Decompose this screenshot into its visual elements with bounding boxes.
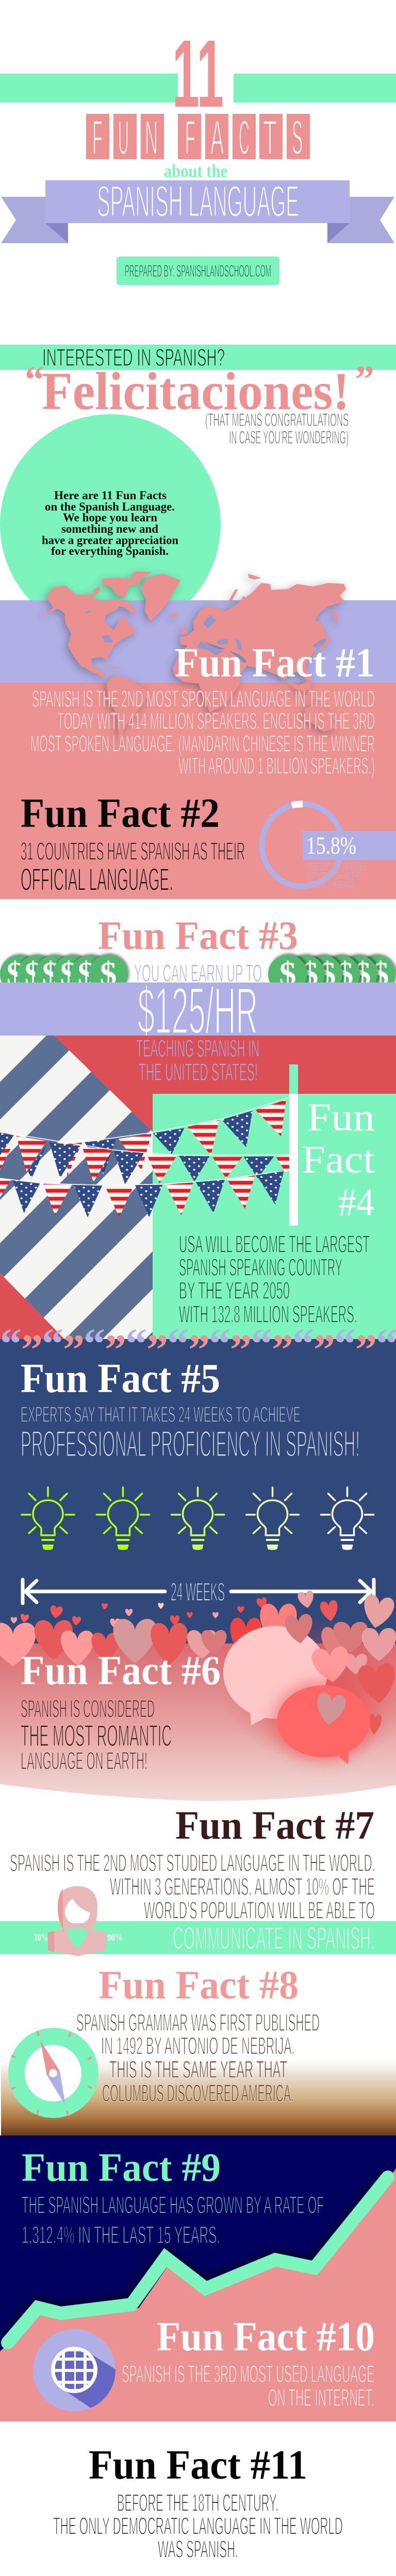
quote mark strip: “: [125, 1320, 147, 1368]
world map: [40, 572, 346, 743]
heading: Fun Fact #2: [21, 791, 220, 836]
panel: fun fact 9: [0, 2136, 396, 2421]
coins left: $: [100, 955, 117, 993]
compass: [8, 2028, 98, 2118]
panel: fun fact 10: [33, 2323, 374, 2411]
quote mark strip: ”: [314, 1326, 335, 1374]
intro paragraph: have a greater appreciation: [42, 534, 178, 547]
coins left: $: [77, 955, 95, 993]
body text: 1,312.4% IN THE LAST 15 YEARS.: [22, 2221, 220, 2248]
intro: [0, 344, 396, 635]
body text: [122, 2360, 374, 2411]
bunting flags: [0, 1097, 289, 1217]
mint band: [0, 1921, 396, 1956]
light bulbs: [22, 1487, 373, 1550]
panel: fun fact 8: [8, 1962, 320, 2118]
heading: Fun Fact #7: [175, 1803, 374, 1848]
heart behind bubble: [284, 1614, 314, 1645]
Fun Facts tiles: U: [118, 110, 129, 164]
hearts: [0, 1590, 396, 1666]
24 weeks arrow: 24 WEEKS: [171, 1578, 225, 1606]
coins right: $: [372, 955, 389, 993]
panel: fun fact 4 flag background: THE UNITED STATES!: [139, 1058, 258, 1086]
body text: [21, 838, 245, 897]
panel: fun fact 6 background: [0, 1618, 396, 1801]
red bubble glow: [273, 1681, 374, 1761]
body text: [53, 2489, 343, 2563]
panel: fun fact 4 flag background: TEACHING SPANISH IN: [136, 1035, 259, 1062]
quote mark strip: “: [167, 1320, 189, 1368]
teaching text: [136, 1035, 259, 1086]
body text: BY THE YEAR 2050: [179, 1277, 290, 1304]
panel: fun fact 1: [30, 640, 375, 779]
heading: Fun Fact #9: [22, 2145, 221, 2190]
person icon: [34, 1886, 123, 1956]
quote mark strip: “: [251, 1320, 272, 1368]
intro paragraph: for everything Spanish.: [51, 545, 169, 557]
quote mark strip: “: [84, 1320, 105, 1368]
coins left: $: [42, 955, 59, 993]
body text: [30, 686, 375, 779]
line chart shadow: [8, 2177, 388, 2343]
heart in red bubble: [314, 1692, 347, 1727]
mint circle: [0, 414, 221, 635]
parchment texture: [1, 2054, 396, 2136]
intro paragraph: on the Spanish Language.: [45, 500, 175, 513]
globe icon: [33, 2329, 117, 2416]
coins right: $: [301, 955, 319, 993]
map inland seas: [85, 611, 242, 655]
ribbon: [1, 177, 394, 243]
heading: Fun Fact #6: [21, 1648, 221, 1693]
coins left: [0, 955, 128, 994]
quote mark strip: ”: [105, 1326, 126, 1374]
body text: [10, 1849, 375, 1924]
panel: fun fact 6: SPANISH IS CONSIDERED: [21, 1696, 155, 1723]
about the: about the: [164, 161, 227, 181]
donut chart: [262, 804, 342, 886]
header: [0, 21, 396, 285]
intro paragraph: something new and: [61, 522, 158, 535]
heading: Fact: [302, 1138, 375, 1181]
body text: [21, 1402, 360, 1465]
quote mark strip: ”: [355, 1326, 377, 1374]
person icon: 10%: [34, 1932, 48, 1943]
lavender amount band: $125/HR: [138, 974, 258, 1048]
coins left: $: [60, 955, 77, 993]
panel: fun fact 4 flag background: [0, 1036, 396, 1339]
panel: fun fact 5: [21, 1356, 374, 1606]
quote mark strip: “: [209, 1320, 230, 1368]
quote mark strip: ”: [188, 1326, 210, 1374]
intro paragraph: We hope you learn: [63, 511, 157, 524]
quote mark strip: “: [334, 1320, 356, 1368]
24 weeks arrow: [23, 1578, 374, 1606]
body text: LANGUAGE ON EARTH!: [21, 1748, 147, 1775]
coins left: $: [6, 955, 24, 993]
light bubble: [223, 1626, 327, 1725]
heading: Fun Fact #11: [89, 2443, 307, 2488]
quote mark strip: “: [292, 1320, 314, 1368]
coins right: $: [354, 955, 371, 993]
body text: [21, 1696, 172, 1775]
percent label: [303, 831, 396, 860]
Fun Facts tiles: C: [239, 110, 250, 164]
quote mark strip: ”: [230, 1326, 252, 1374]
heading: Fun Fact #5: [21, 1356, 220, 1401]
Fun Facts tiles: F: [185, 110, 195, 164]
quote mark strip: [0, 1320, 396, 1374]
body text: [22, 2191, 324, 2248]
body text: OFFICIAL LANGUAGE.: [21, 862, 173, 897]
coins right: $: [336, 955, 354, 993]
coins right: $: [279, 955, 296, 993]
flag stripes: [0, 1036, 153, 1339]
coins right: $: [319, 955, 336, 993]
panel: fun fact 4: [153, 1064, 396, 1339]
felicitaciones heading: ”: [355, 358, 374, 401]
heading: Fun Fact #1: [175, 640, 375, 686]
panel: fun fact 6: THE MOST ROMANTIC: [21, 1719, 172, 1753]
vertical bar: [289, 1064, 298, 1226]
felicitaciones heading: Felicitaciones!: [42, 362, 350, 421]
intro paragraph: Here are 11 Fun Facts: [54, 489, 167, 502]
Fun Facts tiles: [86, 110, 310, 164]
mint bars behind the 11: [0, 74, 396, 103]
panel: fun fact 6: [21, 1648, 221, 1775]
red bubble: [277, 1685, 370, 1764]
hearts at right: [311, 1646, 396, 1735]
Fun Facts tiles: S: [292, 110, 303, 164]
panel: fun fact 3: YOU CAN EARN UP TO: [134, 959, 262, 987]
Fun Facts tiles: A: [210, 110, 224, 164]
body text: WAS SPANISH.: [158, 2535, 238, 2563]
heading: [302, 1096, 375, 1224]
intro paragraph: [42, 489, 178, 557]
panel: fun fact 3: [0, 913, 396, 1048]
percent label: 15.8%: [306, 832, 356, 859]
interested banner: INTERESTED IN SPANISH?: [42, 344, 225, 371]
panel: fun fact 5 background: [0, 1339, 396, 1669]
lavender amount band: [0, 974, 396, 1048]
panel: fun fact 7: [0, 1803, 396, 1956]
chart area: [0, 2168, 396, 2421]
speech bubbles: [223, 1614, 396, 1764]
coins left: $: [25, 955, 41, 993]
heading: Fun: [307, 1096, 375, 1139]
big number 11: 11: [172, 21, 224, 127]
coins right: [268, 955, 395, 994]
quote mark strip: ”: [21, 1326, 43, 1374]
panel: fun fact 2: [21, 791, 396, 897]
Fun Facts tiles: F: [92, 110, 103, 164]
heading: Fun Fact #8: [98, 1962, 299, 2007]
heading: Fun Fact #10: [157, 2314, 375, 2360]
heading: #4: [338, 1181, 374, 1224]
quote mark strip: ”: [146, 1326, 168, 1374]
panel: fun fact 1 and 2 background: [0, 600, 396, 899]
quote mark strip: “: [42, 1320, 63, 1368]
quote mark strip: “: [0, 1320, 22, 1368]
prepared by badge: [117, 257, 279, 285]
chart line: [8, 2177, 388, 2343]
felicitaciones heading: “: [25, 358, 44, 401]
heading: Fun Fact #3: [98, 913, 298, 958]
person icon: 90%: [107, 1932, 123, 1943]
quote mark strip: ”: [272, 1326, 293, 1374]
Fun Facts tiles: N: [145, 110, 158, 164]
percent caption: [307, 861, 366, 891]
translation note: [205, 410, 349, 448]
panel: fun fact 11: [53, 2443, 343, 2563]
body text: [76, 2009, 320, 2107]
body text: [179, 1230, 370, 1328]
quote mark strip: ”: [63, 1326, 85, 1374]
Fun Facts tiles: T: [263, 110, 277, 164]
